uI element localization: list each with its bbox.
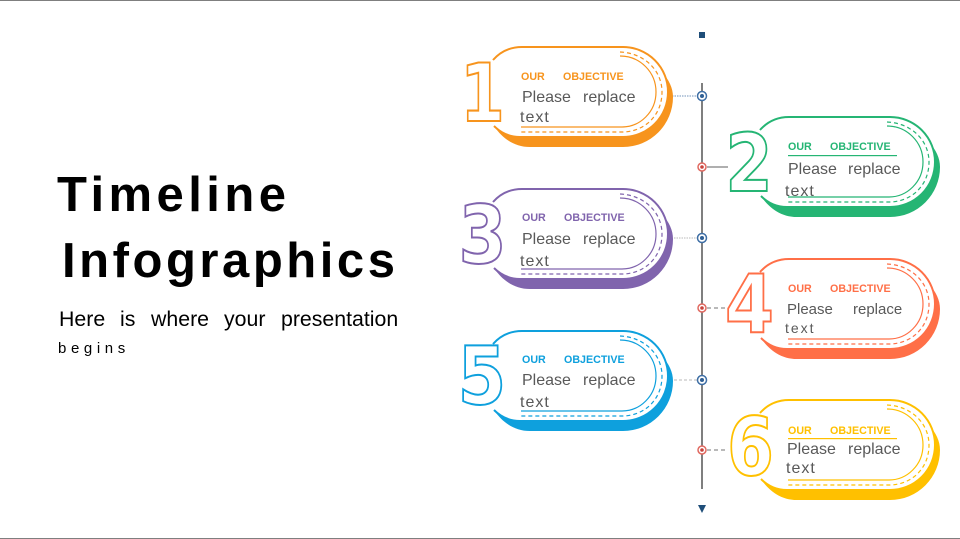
card 3: replace: [583, 231, 636, 248]
title: Timeline: [57, 168, 289, 222]
card 3: text: [520, 253, 550, 270]
card 1: 1: [460, 48, 505, 141]
timeline nodes: [698, 92, 706, 454]
card 6: Please: [787, 441, 836, 458]
card 3: Please: [522, 231, 571, 248]
card 5: Please: [522, 372, 571, 389]
title: [57, 168, 398, 288]
subtitle: presentation: [281, 307, 398, 331]
card 2: [725, 117, 940, 217]
card 5: [458, 329, 673, 431]
card 5: OBJECTIVE: [564, 354, 625, 366]
card 4: OBJECTIVE: [830, 283, 891, 295]
card 4: OUR: [788, 283, 812, 295]
card 5: 5: [458, 329, 506, 423]
card 1: Please: [522, 89, 571, 106]
card 6: text: [786, 460, 816, 477]
card 5: replace: [583, 372, 636, 389]
card 4: 4: [725, 258, 774, 351]
card 1: text: [520, 109, 550, 126]
subtitle: begins: [58, 340, 130, 357]
card 2: 2: [725, 117, 773, 210]
card 1: [460, 47, 673, 147]
timeline axis: [698, 32, 706, 513]
card 6: OUR: [788, 425, 812, 437]
connectors: [672, 96, 728, 450]
card 2: replace: [848, 161, 901, 178]
card 3: OBJECTIVE: [564, 212, 625, 224]
card 2: Please: [788, 161, 837, 178]
subtitle: your: [224, 307, 265, 331]
card 3: 3: [459, 189, 506, 282]
card 4: [725, 258, 940, 359]
card 6: [727, 400, 940, 500]
card 3: [459, 189, 673, 289]
card 1: OBJECTIVE: [563, 71, 624, 83]
card 6: replace: [848, 441, 901, 458]
subtitle: where: [150, 307, 209, 331]
card 1: OUR: [521, 71, 545, 83]
card 3: OUR: [522, 212, 546, 224]
subtitle: Here: [59, 307, 105, 331]
card 4: text: [785, 320, 816, 336]
subtitle: [58, 307, 398, 357]
card 2: OBJECTIVE: [830, 141, 891, 153]
card 4: Please: [787, 301, 833, 318]
card 6: OBJECTIVE: [830, 425, 891, 437]
card 5: text: [520, 394, 550, 411]
card 1: replace: [583, 89, 636, 106]
card 2: OUR: [788, 141, 812, 153]
card 6: 6: [727, 401, 774, 494]
card 5: OUR: [522, 354, 546, 366]
subtitle: is: [120, 307, 135, 331]
card 2: text: [785, 183, 815, 200]
title: Infographics: [62, 234, 398, 288]
card 4: replace: [853, 301, 902, 318]
